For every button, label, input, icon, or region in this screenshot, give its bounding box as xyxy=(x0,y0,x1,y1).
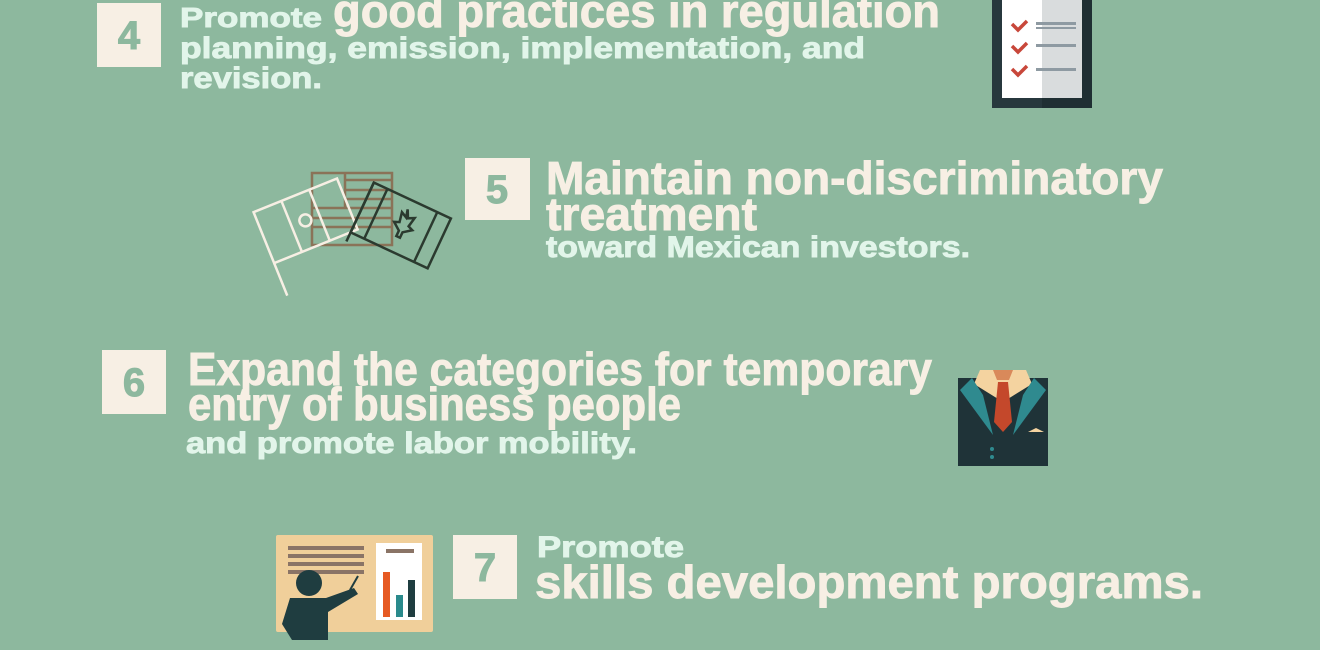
text block 5: Maintain non-discriminatory xyxy=(546,152,1163,204)
icon: clipboard xyxy=(992,0,1092,108)
text block 6: entry of business people xyxy=(188,378,681,430)
number box 5 xyxy=(465,158,530,220)
number box 4: 4 xyxy=(118,14,141,58)
text block 7 xyxy=(535,531,1203,608)
icon: flags xyxy=(254,173,451,296)
text block 5: treatment xyxy=(546,188,757,240)
text block 4: Promote xyxy=(180,2,322,33)
item 5 xyxy=(465,152,1163,264)
text block 4 xyxy=(180,0,940,95)
text block 7: Promote xyxy=(537,531,684,564)
number box 5: 5 xyxy=(486,168,508,212)
text block 6: and promote labor mobility. xyxy=(186,427,637,460)
text block 5: toward Mexican investors. xyxy=(546,231,970,264)
number box 6 xyxy=(102,350,166,414)
text block 4: planning, emission, implementation, and xyxy=(180,32,865,65)
text block 6 xyxy=(186,343,932,460)
number box 4 xyxy=(97,3,161,67)
text block 6: Expand the categories for temporary xyxy=(188,343,932,395)
text block 5 xyxy=(546,152,1163,264)
icon: presenter board xyxy=(276,535,433,640)
number box 7 xyxy=(453,535,517,599)
number box 6: 6 xyxy=(123,361,145,405)
text block 7: skills development programs. xyxy=(535,556,1203,608)
number box 7: 7 xyxy=(474,546,496,590)
icon: suit xyxy=(958,370,1048,466)
text block 4: revision. xyxy=(180,62,322,95)
item 6 xyxy=(102,343,932,460)
item 4 xyxy=(97,0,940,95)
item 7 xyxy=(453,531,1203,608)
